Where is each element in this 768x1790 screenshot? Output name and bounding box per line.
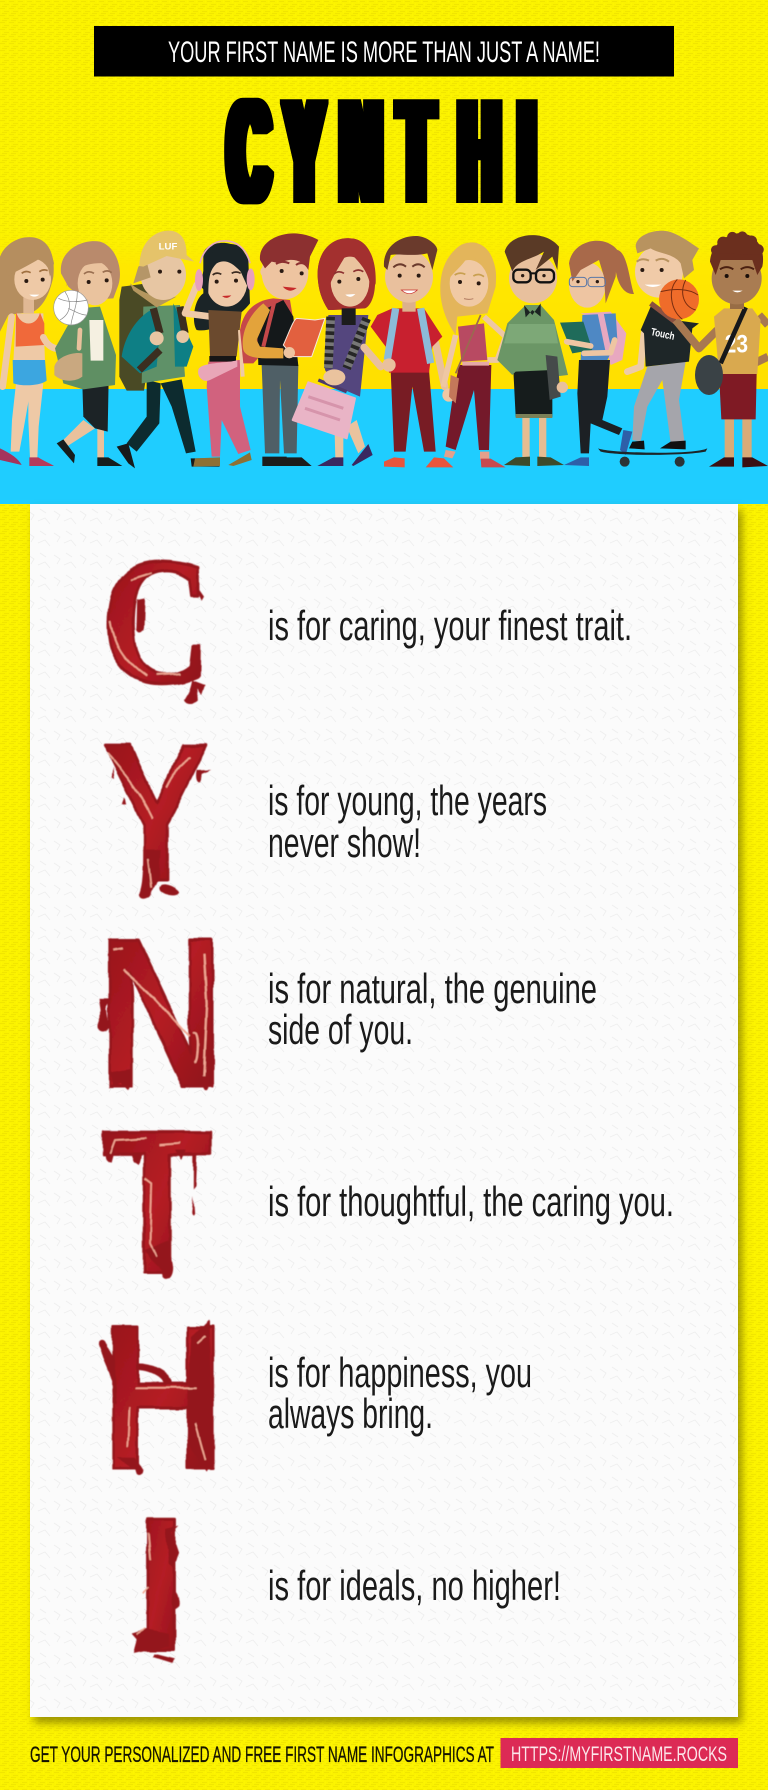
- person 12: boy in yellow number 23 jersey: [659, 231, 768, 467]
- person 5: boy reading a book: [240, 233, 325, 466]
- row: T is for thoughtful: [102, 1087, 674, 1316]
- person 9: boy with glasses and green sweater: [497, 235, 568, 466]
- letter H: H: [102, 1282, 224, 1512]
- row: Y is for young: [102, 703, 547, 922]
- person 11: skateboarder with basketball: Touch: [650, 326, 676, 343]
- row: H is for happiness: [98, 1282, 532, 1512]
- person 1: girl in orange top: [0, 237, 80, 466]
- text: young: is for young, the years: [268, 777, 547, 824]
- person 8: blonde girl in pink top: [440, 242, 506, 467]
- text: young: never show!: [268, 819, 421, 866]
- text: happiness: always bring.: [268, 1390, 433, 1437]
- row: N is for natural: [97, 895, 597, 1132]
- letter T: T: [102, 1087, 212, 1316]
- text: happiness: is for happiness, you: [268, 1349, 532, 1396]
- person 7: boy in red shirt with blue backpack: [364, 236, 453, 467]
- row: I is for ideals: [132, 1479, 561, 1691]
- letter N: N: [98, 895, 224, 1132]
- title: name: CYNTHI: [229, 71, 534, 233]
- person 3: hiker with backpack and cap: [117, 231, 220, 468]
- illustration: group of twelve young people: [0, 225, 768, 504]
- text: natural: is for natural, the genuine: [268, 965, 597, 1012]
- footer link badge: [500, 1738, 738, 1768]
- letter Y: Y: [102, 703, 210, 922]
- person 2: girl with volleyball: [54, 241, 122, 466]
- letter I: I: [136, 1479, 186, 1691]
- text: natural: [268, 965, 597, 1053]
- text: ideals: is for ideals, no higher!: [268, 1562, 561, 1609]
- text: natural: side of you.: [268, 1006, 413, 1053]
- row: C is for caring: [101, 521, 632, 722]
- text: young: [268, 777, 547, 866]
- header banner: [94, 26, 674, 76]
- footer call to action: GET YOUR PERSONALIZED AND FREE FIRST NAME INFOGRAPHICS AT: [30, 1742, 494, 1767]
- person 12: boy in yellow number 23 jersey: 23: [725, 332, 748, 359]
- person 6: girl carrying pink case: [293, 238, 376, 466]
- person 3: hiker with backpack and cap: LUF: [159, 241, 178, 251]
- letter C: C: [101, 521, 211, 722]
- person 11: skateboarder with basketball: [598, 231, 707, 467]
- person 4: girl with pink headphones: [185, 241, 255, 467]
- panel: name meaning: [30, 504, 738, 1717]
- text: happiness: [268, 1349, 532, 1437]
- person 10: girl with ponytail and tablet: [560, 241, 634, 466]
